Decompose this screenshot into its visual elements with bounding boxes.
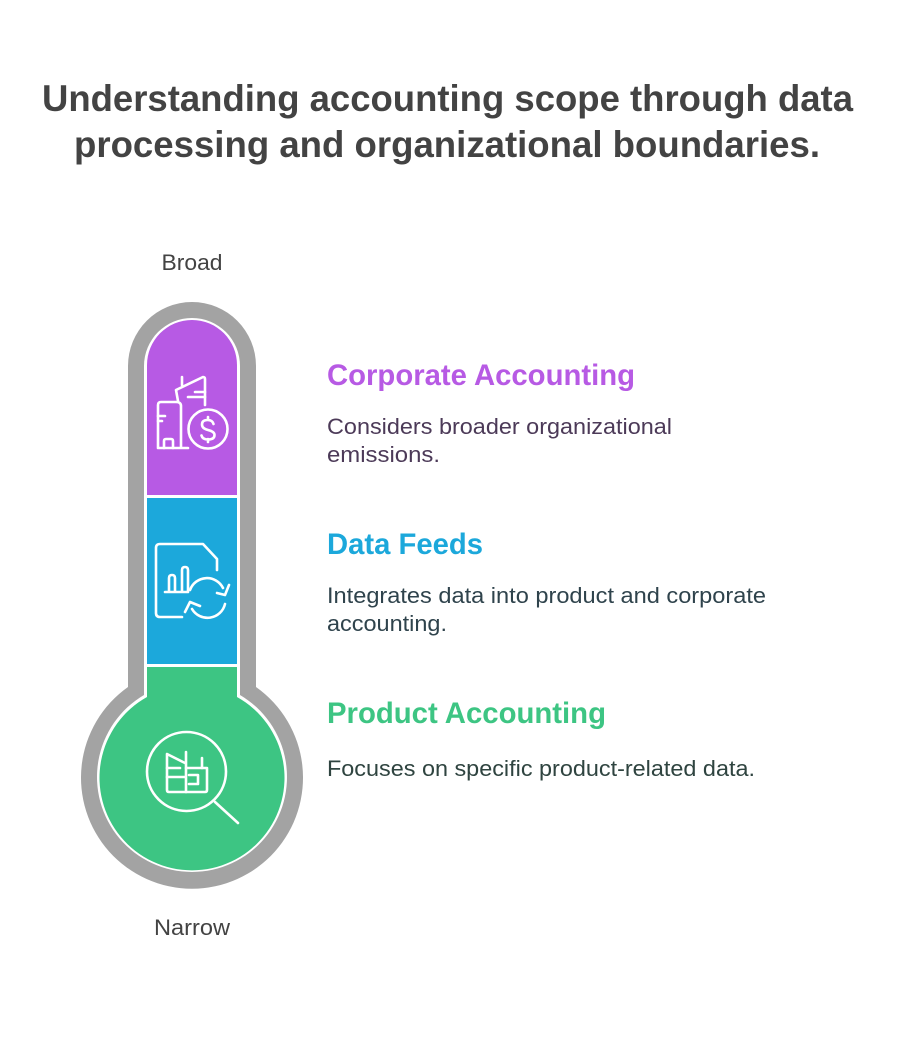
title: processing and organizational boundaries. (74, 124, 820, 165)
icon: building with dollar coin (158, 377, 228, 448)
label: narrow: Narrow (154, 915, 230, 940)
text: corporate description: emissions. (327, 442, 440, 467)
heading: product accounting: Product Accounting (327, 697, 606, 730)
thermometer (81, 302, 303, 889)
text: corporate description: Considers broader organizational (327, 414, 672, 439)
thermometer inner border (97, 318, 287, 872)
thermometer outline (81, 302, 303, 889)
title (42, 78, 853, 165)
text: product description: Focuses on specific product-related data. (327, 756, 755, 781)
heading: corporate accounting: Corporate Accounting (327, 359, 635, 392)
segment: corporate (147, 320, 237, 495)
icon: document with chart and refresh arrows (156, 544, 229, 618)
text: data feeds description: Integrates data into product and corporate (327, 583, 766, 608)
text: data feeds description: accounting. (327, 611, 447, 636)
icon: factory under magnifying glass (147, 732, 238, 823)
heading: data feeds: Data Feeds (327, 528, 483, 561)
text: corporate description (327, 414, 672, 467)
label: broad: Broad (162, 250, 222, 275)
segment: product (100, 667, 284, 870)
text: data feeds description (327, 583, 766, 636)
title: Understanding accounting scope through data (42, 78, 853, 119)
segment: data feeds (147, 498, 237, 664)
